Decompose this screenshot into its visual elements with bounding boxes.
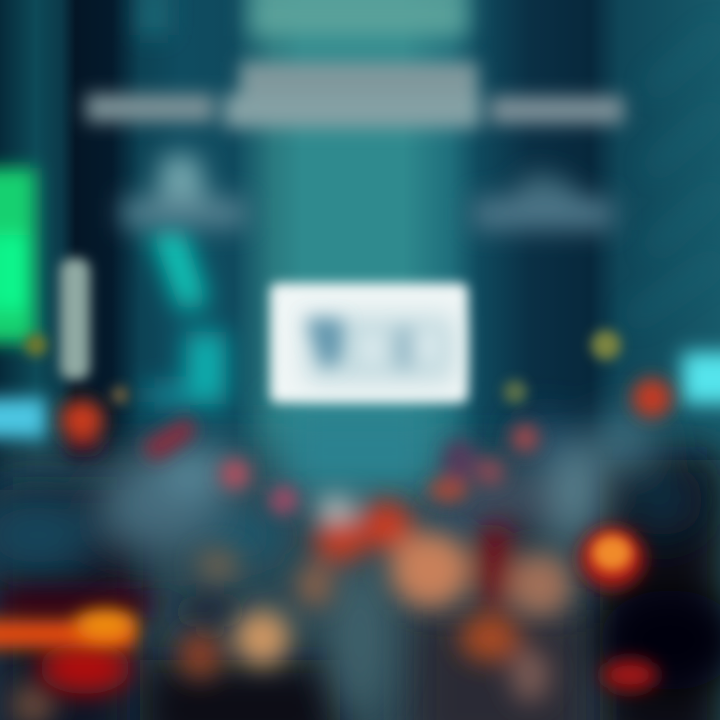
background: road and traffic base (0, 405, 720, 720)
background: traffic blue and gray patches (0, 412, 720, 720)
text: blurred logo letters (359, 328, 441, 368)
glow: cyan left (0, 398, 46, 438)
title: blurred heading lines (86, 62, 624, 128)
neon sign: white (60, 258, 90, 380)
icon: blurred blue logo mark (306, 318, 344, 368)
car light: left orange bar (0, 590, 150, 694)
traffic lights: small signals (25, 330, 621, 404)
headlights: central orange and white glows (11, 496, 572, 720)
text block: right blurred subheading (472, 172, 614, 230)
background: right building stripes (630, 30, 720, 320)
background: sky gap at top (140, 0, 468, 36)
glow: cyan right (682, 352, 720, 404)
car light: right orange glow (580, 528, 658, 691)
neon sign: teal strip (146, 225, 226, 405)
text block: left blurred subheading (122, 155, 247, 228)
card: white logo panel (270, 283, 468, 403)
neon sign: green (0, 168, 36, 343)
tail lights: red signals (60, 378, 672, 514)
